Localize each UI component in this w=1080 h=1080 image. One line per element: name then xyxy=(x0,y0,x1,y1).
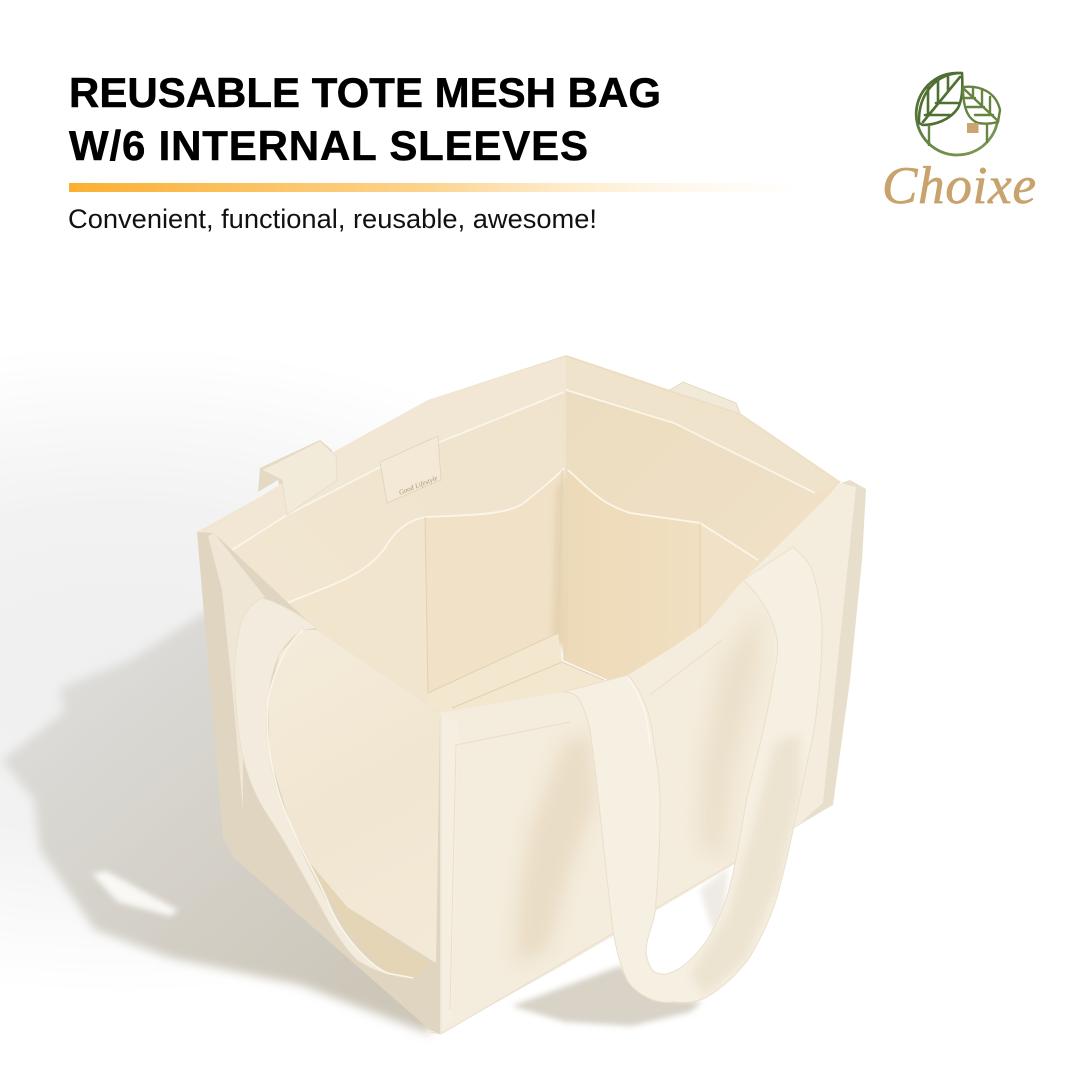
strap stitching xyxy=(628,678,650,745)
left tan wedge xyxy=(310,863,430,978)
cast shadow on floor xyxy=(2,612,728,1034)
title: W/6 INTERNAL SLEEVES xyxy=(69,122,588,169)
strap cream edge xyxy=(267,630,413,978)
front corner strip xyxy=(440,713,458,1034)
right pocket panel xyxy=(563,470,700,680)
right outer side strip xyxy=(800,480,866,823)
title: REUSABLE TOTE MESH BAG xyxy=(69,69,661,116)
sewn label tag: Good Lifestyle xyxy=(398,474,439,497)
right back handle loop xyxy=(670,382,741,420)
upper hem, left wall xyxy=(203,357,566,550)
logo window xyxy=(967,123,978,133)
far right pocket panel xyxy=(700,523,758,640)
logo left leaf xyxy=(919,73,962,125)
hem stitching xyxy=(232,390,815,550)
logo right leaf xyxy=(963,87,1000,124)
left main panel xyxy=(268,630,440,963)
sewn label tag xyxy=(380,436,441,503)
logo ring xyxy=(916,73,998,155)
face seam lines xyxy=(430,640,830,1034)
left back handle loop xyxy=(258,440,337,515)
logo house walls xyxy=(929,123,987,146)
logo wordmark: Choixe xyxy=(882,157,1036,215)
right strap loop xyxy=(563,547,822,1002)
floor seams xyxy=(425,470,700,708)
pocket rim stitching xyxy=(287,468,758,603)
strap shading xyxy=(690,735,800,995)
soft grey backdrop glow xyxy=(0,240,1080,1080)
tote bag xyxy=(197,355,866,1034)
left side light strip xyxy=(208,533,265,810)
right front face xyxy=(440,483,856,1034)
face shadow behind rear strap xyxy=(700,610,760,858)
bag floor xyxy=(428,633,608,713)
near-left strap xyxy=(235,598,413,978)
orange gradient rule xyxy=(69,183,790,192)
subtitle: Convenient, functional, reusable, awesome! xyxy=(68,204,597,234)
brand logo xyxy=(882,73,1036,215)
corner shadow xyxy=(552,472,566,655)
back-right wall xyxy=(566,355,841,640)
upper hem, right wall xyxy=(566,357,838,493)
left pocket panels xyxy=(287,517,440,713)
title xyxy=(69,69,661,169)
left side base band xyxy=(197,532,440,1034)
left handle tab front xyxy=(262,441,337,515)
back-left wall xyxy=(197,355,566,713)
face shadow left of near strap xyxy=(515,735,596,965)
centre pocket panel xyxy=(425,470,563,693)
